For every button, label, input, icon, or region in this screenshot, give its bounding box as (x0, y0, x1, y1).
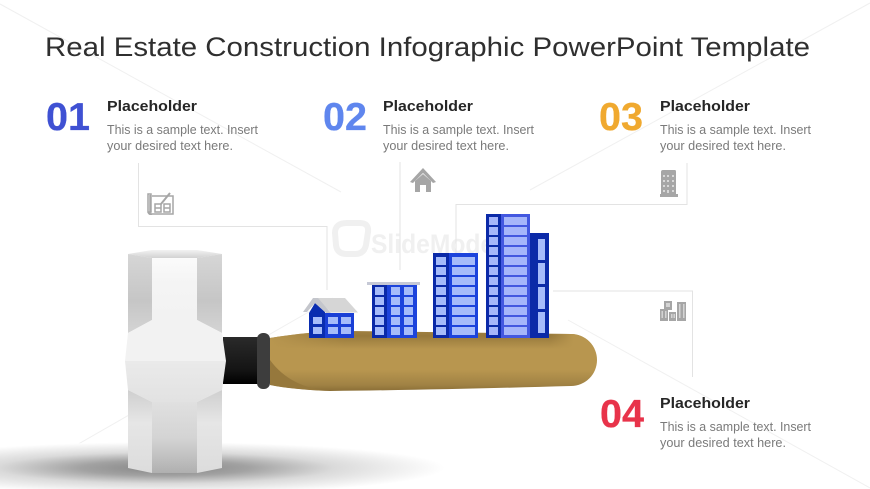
hammer head (125, 250, 226, 473)
item 03: your desired text here. (660, 139, 786, 153)
hammer handle (270, 331, 597, 391)
hammer collar (223, 337, 259, 384)
item 04: 04 (600, 393, 644, 436)
icon: city buildings (660, 301, 686, 321)
item 04: your desired text here. (660, 436, 786, 450)
building 3 (433, 253, 478, 338)
item 02: your desired text here. (383, 139, 509, 153)
building 2 (367, 282, 420, 338)
item 02: Placeholder (383, 98, 473, 115)
item 01: This is a sample text. Insert (107, 123, 259, 137)
title: Real Estate Construction Infographic PowerPoint Template (45, 32, 810, 62)
collar ring (257, 333, 270, 389)
icon: blueprint (148, 193, 173, 214)
item 01: 01 (46, 96, 90, 139)
building 4 (486, 214, 530, 338)
house on handle (303, 298, 358, 338)
icon: office building (660, 170, 678, 197)
item 04: This is a sample text. Insert (660, 420, 812, 434)
item 04 (600, 393, 812, 450)
item 01 (46, 96, 259, 153)
item 03: 03 (599, 96, 643, 139)
connector lines (138, 162, 692, 377)
building 5 (530, 233, 549, 338)
item 04: Placeholder (660, 395, 750, 412)
item 03: This is a sample text. Insert (660, 123, 812, 137)
item 01: Placeholder (107, 98, 197, 115)
shadow under hammer (0, 442, 445, 489)
background watermark: SlideModel (371, 229, 501, 259)
icon: house (410, 168, 436, 192)
item 02: 02 (323, 96, 367, 139)
item 02 (323, 96, 535, 153)
item 03 (599, 96, 812, 153)
item 02: This is a sample text. Insert (383, 123, 535, 137)
item 01: your desired text here. (107, 139, 233, 153)
item 03: Placeholder (660, 98, 750, 115)
hammer (125, 250, 605, 473)
